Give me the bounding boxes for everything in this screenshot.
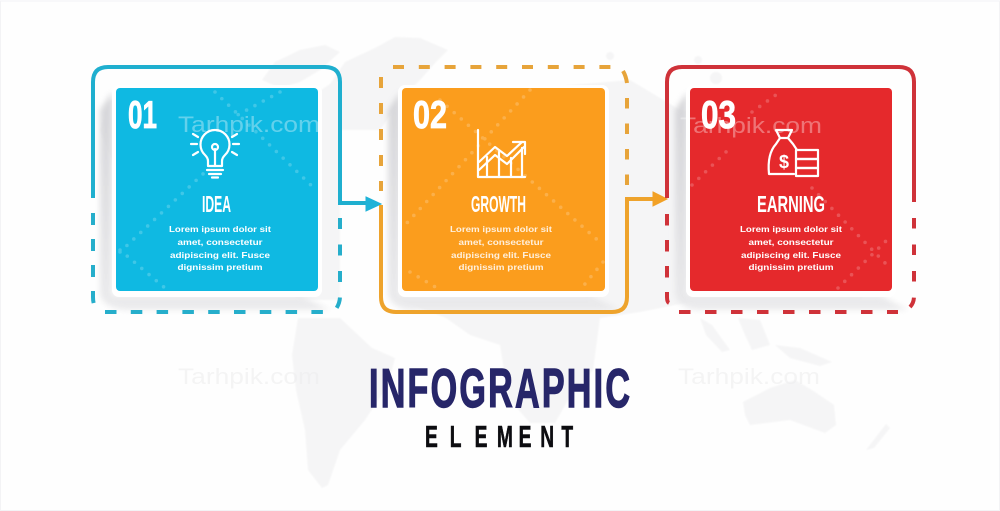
title xyxy=(369,358,632,454)
body text: idea: adipiscing elit. Fusce xyxy=(170,251,271,260)
arrow: step 2 to step 3 xyxy=(653,192,667,206)
watermarks xyxy=(178,112,822,389)
step 3 outline: red solid and dashed frame xyxy=(667,67,914,312)
watermarks: Tarhpik.com xyxy=(680,113,822,138)
watermarks: Tarhpik.com xyxy=(178,364,320,389)
body text: growth: adipiscing elit. Fusce xyxy=(451,251,552,260)
icon: light bulb xyxy=(191,130,239,178)
card 3: earning xyxy=(686,85,896,297)
step 1 outline: blue solid and dashed frame xyxy=(93,67,381,312)
title: INFOGRAPHIC xyxy=(369,358,632,419)
body text: idea: Lorem ipsum dolor sit xyxy=(169,225,271,234)
icon: dollar sign: $ xyxy=(779,152,789,172)
body text: growth: amet, consectetur xyxy=(458,238,544,247)
heading: growth: GROWTH xyxy=(471,191,526,217)
body text: earning: adipiscing elit. Fusce xyxy=(741,251,842,260)
card 2: growth xyxy=(398,85,609,297)
icon: money bag and coins xyxy=(769,130,818,176)
heading: earning: EARNING xyxy=(757,191,825,217)
body text: growth xyxy=(450,225,552,272)
arrow: step 1 to step 2 xyxy=(366,197,381,211)
body text: earning xyxy=(740,225,842,272)
icon: growth chart xyxy=(478,130,525,177)
watermarks: Tarhpik.com xyxy=(678,364,820,389)
number 01: 01 xyxy=(128,94,157,137)
heading: idea: IDEA xyxy=(202,191,231,217)
watermarks: Tarhpik.com xyxy=(178,112,320,137)
world map background xyxy=(100,37,895,488)
subtitle: ELEMENT xyxy=(425,421,573,454)
body text: earning: Lorem ipsum dolor sit xyxy=(740,225,842,234)
step 2 outline: orange dashed and solid frame xyxy=(381,67,667,312)
body text: idea xyxy=(169,225,271,272)
body text: idea: amet, consectetur xyxy=(178,238,263,247)
number 02: 02 xyxy=(413,94,447,137)
body text: earning: dignissim pretium xyxy=(748,263,834,272)
card shadows xyxy=(100,92,908,310)
body text: growth: Lorem ipsum dolor sit xyxy=(450,225,552,234)
body text: idea: dignissim pretium xyxy=(178,263,262,272)
card 1: idea xyxy=(112,85,322,297)
body text: earning: amet, consectetur xyxy=(748,238,834,247)
number 03: 03 xyxy=(701,94,736,137)
body text: growth: dignissim pretium xyxy=(458,263,544,272)
